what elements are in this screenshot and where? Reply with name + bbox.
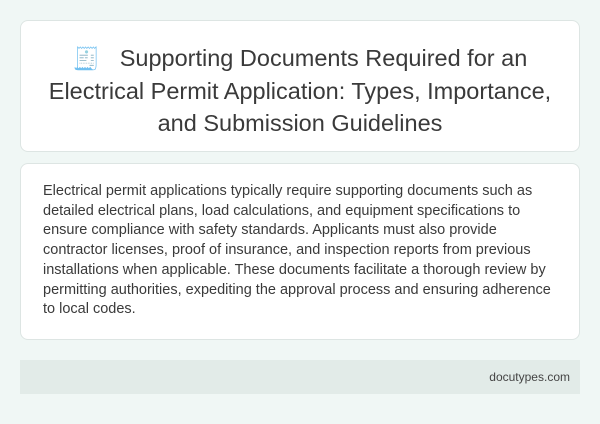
description text: Electrical permit applications typically require supporting documents such as detailed electrical plans, load calculations, and equipment specifications to ensure compliance with safety standards. Applicants must also provide contractor licenses, proof of insurance, and inspection reports from previous installations when applicable. These documents facilitate a thorough review by permitting authorities, expediting the approval process and ensuring adherence to local codes.	[43, 183, 551, 317]
description panel	[20, 163, 580, 340]
title: 🧾 Supporting Documents Required for an Electrical Permit Application: Types, Importance, and Submission Guidelines	[49, 44, 551, 136]
footer: docutypes.com	[489, 370, 570, 384]
footer	[20, 360, 580, 394]
title panel	[20, 20, 580, 152]
